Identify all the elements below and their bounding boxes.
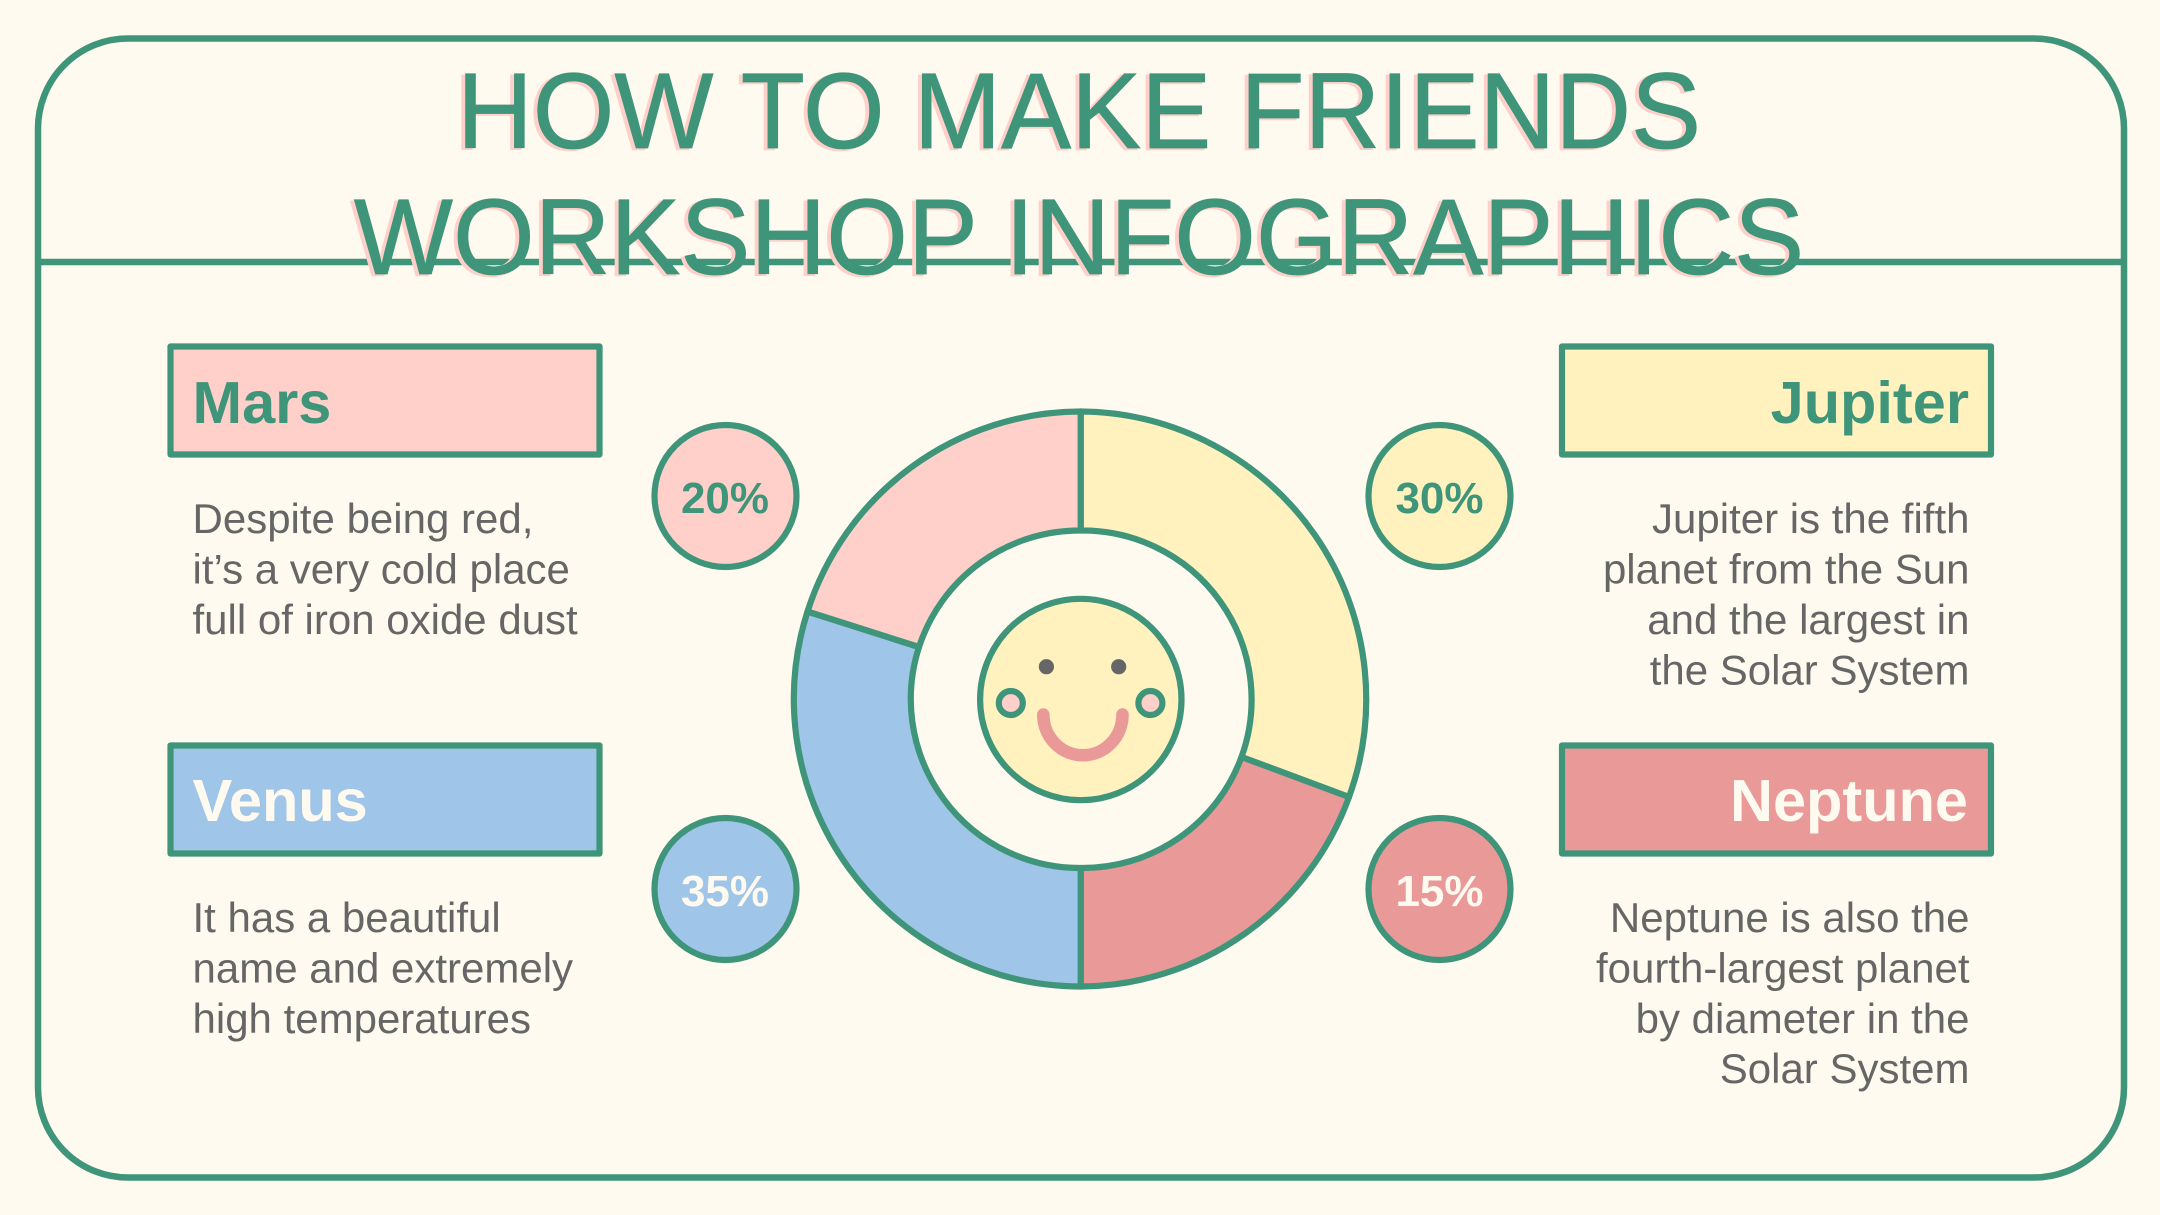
title: WORKSHOP INFOGRAPHICS xyxy=(350,178,1801,299)
panel: Venus: name and extremely xyxy=(192,944,573,992)
segment: yellow xyxy=(1081,412,1366,797)
badge: 35% xyxy=(654,818,796,960)
panel: Neptune: fourth-largest planet xyxy=(1596,944,1970,992)
badge: 30% xyxy=(1368,425,1510,567)
panel: Jupiter: and the largest in xyxy=(1647,596,1970,643)
panel: Neptune: by diameter in the xyxy=(1636,995,1970,1042)
panel: Jupiter: planet from the Sun xyxy=(1603,546,1970,592)
badge: 35%: 35% xyxy=(681,867,769,916)
panel: Jupiter: Jupiter is the fifth xyxy=(1652,495,1970,542)
segment: red xyxy=(1081,757,1349,986)
badge: 30%: 30% xyxy=(1395,474,1484,523)
badge: 15%: 15% xyxy=(1395,867,1484,916)
panel: Mars: full of iron oxide dust xyxy=(192,596,578,643)
panel: Venus: high temperatures xyxy=(192,995,531,1042)
panel: Neptune: Neptune is also the xyxy=(1610,894,1970,941)
panel: Jupiter: the Solar System xyxy=(1650,646,1970,694)
title: HOW TO MAKE FRIENDS xyxy=(457,51,1701,171)
panel: Jupiter xyxy=(1562,346,1991,694)
title: HOW TO MAKE FRIENDS xyxy=(453,52,1698,173)
panel: Venus xyxy=(170,746,600,1042)
panel: Neptune xyxy=(1562,746,1991,1092)
badge: 20%: 20% xyxy=(681,474,769,523)
panel: Mars: Mars xyxy=(192,369,331,436)
panel: Jupiter: Jupiter xyxy=(1771,369,1969,436)
icon: smiley face xyxy=(980,599,1182,800)
panel: Neptune: Neptune xyxy=(1730,767,1968,834)
panel: Mars: Despite being red, xyxy=(192,495,533,542)
segment: pink xyxy=(808,412,1081,647)
badge: 15% xyxy=(1368,818,1510,960)
segment: blue xyxy=(794,612,1081,986)
panel: Venus: It has a beautiful xyxy=(192,894,501,941)
title xyxy=(350,51,1804,299)
panel: Venus: Venus xyxy=(192,767,368,834)
donut chart xyxy=(794,412,1366,986)
panel: Mars xyxy=(170,346,600,643)
badge: 20% xyxy=(654,425,796,567)
panel: Mars: it’s a very cold place xyxy=(192,546,570,592)
title: WORKSHOP INFOGRAPHICS xyxy=(354,177,1804,297)
panel: Neptune: Solar System xyxy=(1720,1045,1970,1092)
